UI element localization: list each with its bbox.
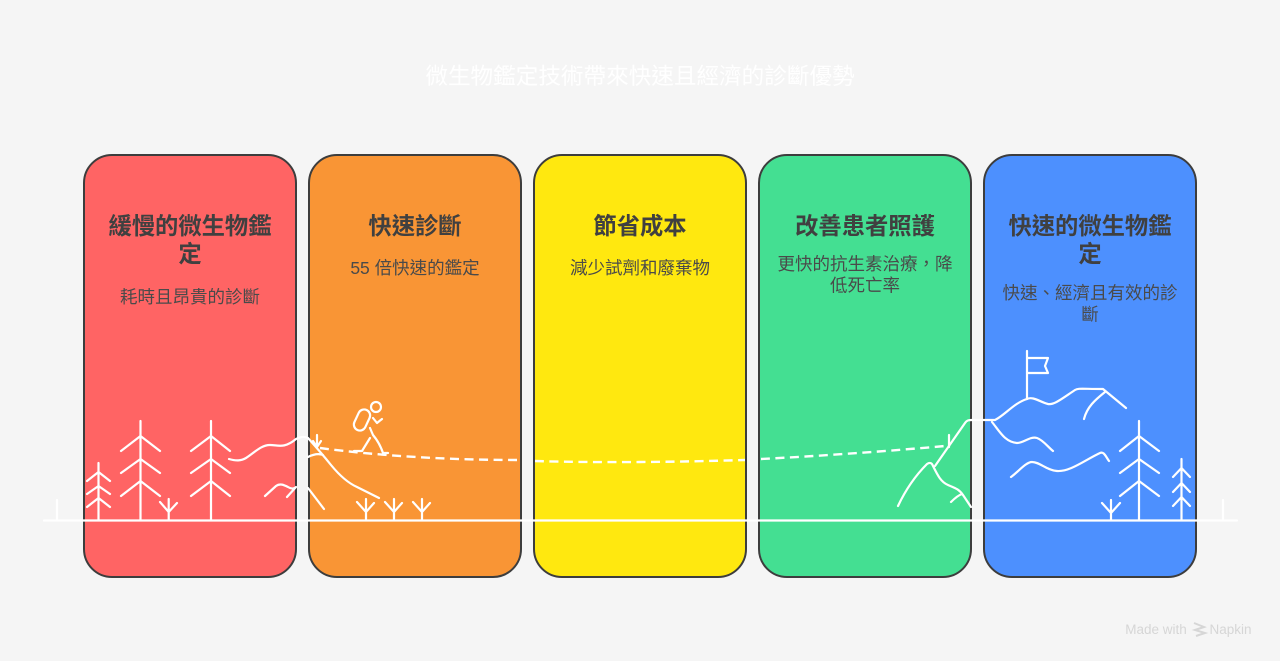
panel: fast identification — [984, 155, 1196, 577]
text: improved patient care: 低死亡率 — [830, 276, 900, 296]
text: fast identification: 斷 — [1081, 304, 1099, 324]
icon: grass left — [160, 499, 177, 520]
panel: cost saving — [534, 155, 746, 577]
icon: tall tree 1 — [121, 421, 160, 520]
icon: small tree right — [1173, 459, 1190, 520]
icon: trail marker left — [313, 435, 321, 447]
icon: tall tree right — [1120, 421, 1159, 520]
heading: rapid diagnosis: 快速診斷 — [368, 213, 462, 239]
icon: tall tree 2 — [191, 421, 230, 520]
icon: flag — [1027, 351, 1048, 399]
heading: slow identification: 定 — [178, 241, 202, 267]
title: 微生物鑑定技術帶來快速且經濟的診斷優勢 — [425, 64, 855, 89]
icon: trail marker right — [948, 435, 950, 447]
heading: fast identification: 快速的微生物鑑 — [1008, 213, 1172, 239]
icon: left hills — [229, 437, 379, 509]
panel: rapid diagnosis — [309, 155, 521, 577]
watermark — [1125, 622, 1252, 637]
heading: fast identification: 定 — [1078, 241, 1102, 267]
text: rapid diagnosis: 55 倍快速的鑑定 — [350, 258, 480, 278]
text: fast identification: 快速、經濟且有效的診 — [1002, 283, 1178, 303]
icon: grass tufts — [357, 499, 430, 520]
panel: slow identification — [84, 155, 296, 577]
text: slow identification: 耗時且昂貴的診斷 — [120, 287, 260, 307]
icon: small tree left — [87, 463, 110, 520]
heading: improved patient care: 改善患者照護 — [795, 213, 935, 239]
watermark: Napkin — [1209, 622, 1252, 637]
watermark: Made with — [1125, 622, 1187, 637]
icon: hiker — [352, 402, 388, 453]
dashed trail — [320, 446, 945, 462]
panel: improved patient care — [759, 155, 971, 577]
icon: napkin logo — [1194, 623, 1205, 636]
heading: cost saving: 節省成本 — [593, 213, 687, 239]
heading: slow identification: 緩慢的微生物鑑 — [108, 213, 272, 239]
text: cost saving: 減少試劑和廢棄物 — [570, 258, 710, 278]
ground line — [44, 519, 1237, 522]
icon: grass right — [1102, 500, 1120, 520]
ticks at the ends of the ground line — [57, 500, 1223, 520]
icon: right hills — [898, 389, 1126, 507]
text: improved patient care: 更快的抗生素治療，降 — [778, 254, 952, 274]
